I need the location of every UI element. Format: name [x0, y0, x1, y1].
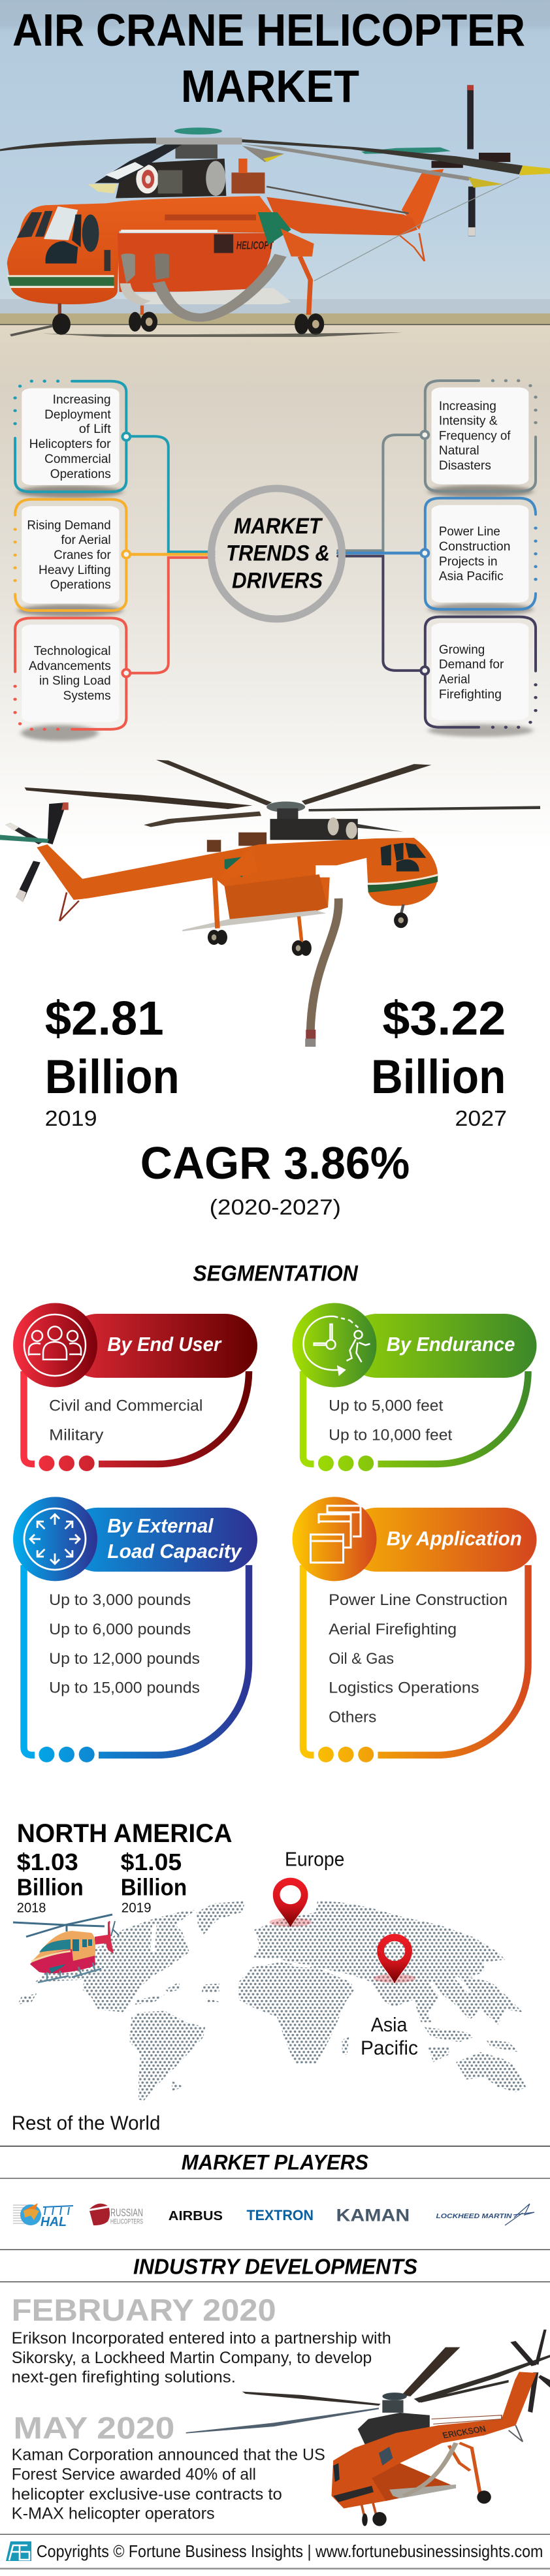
market size stat: 2027 [371, 993, 507, 1130]
title [12, 5, 525, 112]
driver text: deployment of lift helicopters: Operations [50, 468, 111, 481]
driver text: aerial firefighting: Growing [439, 643, 485, 657]
driver text: natural disasters [439, 400, 511, 473]
driver text: power line construction [439, 525, 511, 584]
driver text: deployment of lift helicopters: Deployment [44, 408, 111, 422]
illustration: orange helicopter flying, bottom right [186, 2330, 550, 2526]
panel: by end user [13, 1303, 257, 1471]
CAGR stat: CAGR 3.86% [140, 1137, 410, 1188]
driver text: deployment of lift helicopters: Commercial [44, 453, 111, 466]
illustration: orange helicopter with hose in flight [0, 760, 540, 1047]
driver text: power line construction: Construction [439, 540, 511, 554]
logo: Textron: TEXTRON [247, 2207, 314, 2223]
logo: Kaman: KAMAN [336, 2206, 410, 2225]
development: May 2020: Forest Service awarded 40% of all [12, 2466, 256, 2484]
map label: Asia Pacific: Pacific [361, 2036, 418, 2059]
panel: by end user: Military [49, 1426, 103, 1444]
driver text: sling load systems: in Sling Load [39, 675, 111, 688]
logo: Russian Helicopters [89, 2204, 143, 2226]
panel: by external load capacity: Up to 3,000 pounds [49, 1591, 191, 1609]
driver text: sling load systems: Advancements [29, 660, 111, 673]
development: February 2020: Sikorsky, a Lockheed Martin Company, to develop [12, 2349, 372, 2367]
map label: Rest of the World: Rest of the World [12, 2111, 160, 2134]
driver text: power line construction: Projects in [439, 555, 498, 569]
panel: by application [293, 1497, 537, 1762]
heading: segmentation: SEGMENTATION [193, 1261, 359, 1286]
logo: Airbus: AIRBUS [169, 2209, 223, 2223]
illustration: orange helicopter flying, bottom right: ERICKSON [442, 2425, 487, 2441]
driver text: aerial cranes: Heavy Lifting [39, 564, 111, 577]
driver text: aerial firefighting: Aerial [439, 673, 470, 686]
logo: Russian Helicopters: HELICOPTERS [110, 2218, 143, 2226]
panel: by endurance: Up to 5,000 feet [329, 1397, 444, 1415]
market size stat: 2019: Billion [45, 1051, 180, 1104]
illustration: orange air crane helicopter on the ground: HELICOPT [236, 239, 274, 251]
icon: clock and walking person [303, 1316, 370, 1375]
development: May 2020: helicopter exclusive-use contracts to [12, 2485, 282, 2504]
panel: market trends and drivers [13, 379, 538, 741]
development: February 2020: FEBRUARY 2020 [12, 2293, 276, 2327]
region value: North America: Billion [121, 1873, 187, 1900]
logo: Lockheed Martin: LOCKHEED MARTIN [436, 2213, 512, 2220]
panel: by end user: Civil and Commercial [49, 1397, 202, 1415]
driver text: deployment of lift helicopters: Increasing [53, 393, 111, 407]
panel: by external load capacity: Load Capacity [107, 1540, 242, 1563]
driver text: aerial cranes: Operations [50, 579, 111, 592]
logo: HAL [13, 2203, 73, 2229]
connector lines and box outlines [13, 379, 538, 741]
driver text: sling load systems: Systems [63, 690, 111, 703]
market size stat: 2019 [45, 993, 180, 1130]
heading: industry developments: INDUSTRY DEVELOPMENTS [133, 2255, 417, 2279]
logo: HAL: HAL [40, 2215, 67, 2229]
market size stat: 2019: $2.81 [45, 993, 164, 1045]
development: February 2020: Erikson Incorporated entered into a partnership with [12, 2329, 391, 2347]
CAGR stat [140, 1137, 410, 1219]
panel: by application: Aerial Firefighting [329, 1621, 457, 1638]
panel: by external load capacity [13, 1497, 257, 1762]
region value: North America: Billion [17, 1873, 84, 1900]
panel: by external load capacity: By External [107, 1514, 214, 1537]
dotted world map [18, 1901, 526, 2101]
driver text: aerial cranes [27, 519, 111, 592]
market size stat: 2027: 2027 [455, 1106, 507, 1130]
icon: map pin Asia Pacific [374, 1934, 415, 1983]
driver text: power line construction: Asia Pacific [439, 570, 504, 584]
driver text: aerial cranes: Rising Demand [27, 519, 111, 533]
logo: Fortune Business Insights [6, 2541, 31, 2561]
development: May 2020: MAY 2020 [13, 2410, 174, 2445]
panel: by application: Logistics Operations [329, 1679, 479, 1697]
panel: by endurance: Up to 10,000 feet [329, 1426, 453, 1444]
panel: by endurance: By Endurance [387, 1333, 515, 1356]
panel: by endurance [293, 1303, 537, 1471]
development: May 2020: K-MAX helicopter operators [12, 2505, 215, 2523]
centre circle: market trends and drivers [212, 488, 342, 619]
driver text: aerial firefighting: Firefighting [439, 688, 502, 701]
map label: Asia Pacific: Asia [371, 2013, 408, 2036]
driver text: aerial cranes: Cranes for [54, 549, 111, 562]
icon: map pin Europe [269, 1878, 312, 1927]
region value: North America: 2019 [121, 1900, 152, 1915]
driver text: aerial cranes: for Aerial [61, 533, 111, 547]
driver text: aerial firefighting [439, 643, 504, 701]
driver text: deployment of lift helicopters: Helicopters for [29, 437, 111, 451]
region value: North America: $1.05 [121, 1849, 182, 1875]
logo: Lockheed Martin [436, 2204, 534, 2225]
driver text: sling load systems [29, 644, 111, 703]
panel: by external load capacity: Up to 15,000 pounds [49, 1679, 200, 1697]
region value: North America [17, 1819, 233, 1915]
panel: by end user: By End User [107, 1333, 222, 1356]
driver text: natural disasters: Frequency of [439, 430, 511, 443]
driver text: power line construction: Power Line [439, 525, 500, 539]
map label: Europe: Europe [285, 1848, 344, 1871]
centre circle: market trends and drivers: TRENDS & [226, 541, 330, 565]
market size stat: 2027: Billion [371, 1051, 506, 1104]
driver text: natural disasters: Intensity & [439, 415, 498, 428]
panel: by application: Oil & Gas [329, 1650, 394, 1668]
panel: by external load capacity: Up to 6,000 pounds [49, 1621, 191, 1638]
title: MARKET [181, 61, 359, 112]
region value: North America: NORTH AMERICA [17, 1819, 233, 1848]
icon: group of people [24, 1314, 86, 1376]
background: sky and tarmac [0, 0, 550, 849]
logo: Russian Helicopters: RUSSIAN [110, 2206, 143, 2219]
driver text: sling load systems: Technological [34, 644, 111, 658]
driver text: deployment of lift helicopters [29, 393, 112, 481]
CAGR stat: (2020-2027) [210, 1195, 341, 1219]
development: May 2020 [12, 2410, 325, 2523]
heading: market players: MARKET PLAYERS [182, 2151, 369, 2174]
development: February 2020: next-gen firefighting solutions. [12, 2368, 236, 2387]
market size stat: 2019: 2019 [45, 1106, 97, 1130]
region value: North America: 2018 [17, 1900, 46, 1915]
illustration: orange air crane helicopter on the ground [0, 85, 550, 337]
icon: stacked application windows [311, 1506, 361, 1563]
market size stat: 2027: $3.22 [382, 993, 506, 1045]
icon: arrows pointing outward [24, 1508, 86, 1570]
development: February 2020 [12, 2293, 391, 2387]
panel: by application: Power Line Construction [329, 1591, 508, 1609]
panel: by application: Others [329, 1709, 376, 1726]
driver text: aerial firefighting: Demand for [439, 658, 504, 671]
centre circle: market trends and drivers: MARKET [234, 514, 323, 539]
driver text: natural disasters: Disasters [439, 459, 491, 473]
centre circle: market trends and drivers: DRIVERS [232, 569, 323, 594]
development: May 2020: Kaman Corporation announced that the US [12, 2446, 325, 2464]
map label: Asia Pacific [361, 2013, 418, 2059]
panel: by application: By Application [387, 1527, 522, 1550]
driver text: natural disasters: Natural [439, 444, 479, 458]
driver text: natural disasters: Increasing [439, 400, 496, 413]
panel: by external load capacity: Up to 12,000 pounds [49, 1650, 200, 1668]
icon: small cartoon helicopter [13, 1915, 119, 1982]
driver text: deployment of lift helicopters: of Lift [79, 422, 112, 436]
region value: North America: $1.03 [17, 1849, 78, 1875]
